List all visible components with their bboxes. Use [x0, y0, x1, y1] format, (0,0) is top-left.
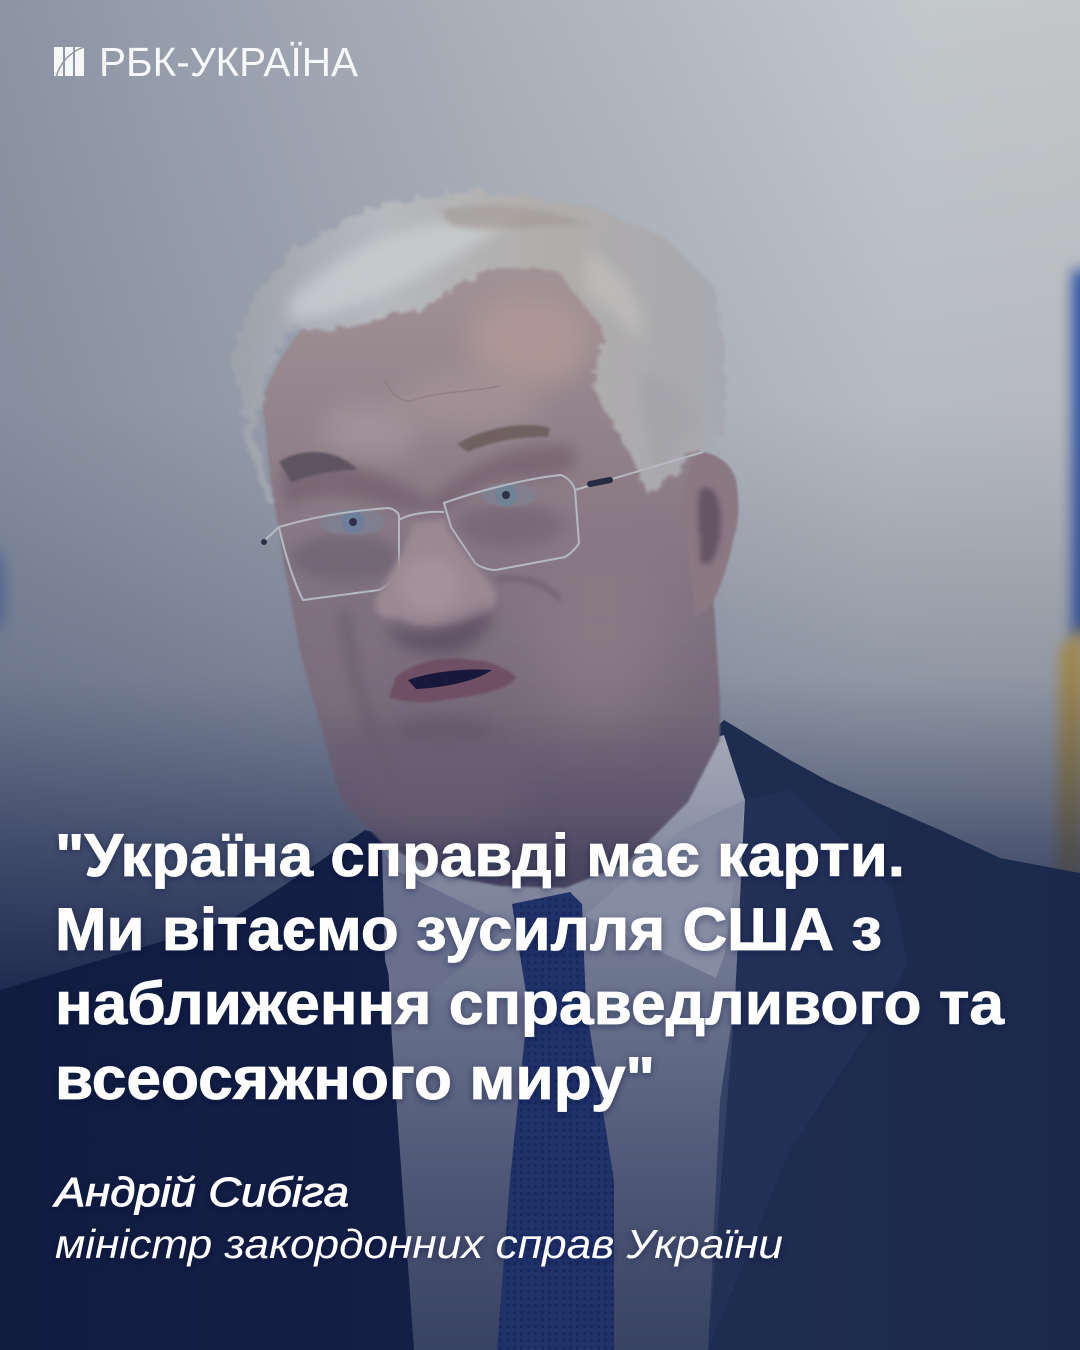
quote: наближення справедливого та: [55, 970, 1005, 1037]
speaker title: міністр закордонних справ України: [55, 1221, 783, 1267]
nasolabial fold: [496, 579, 560, 600]
forehead highlights: [320, 295, 590, 458]
attribution: [52, 1169, 783, 1267]
left collar: [382, 850, 510, 1020]
logo: [54, 39, 359, 85]
suit jacket: [0, 720, 1080, 1350]
brow shadow: [280, 445, 576, 512]
right collar: [585, 800, 745, 978]
forehead wrinkles: [385, 380, 500, 401]
ear: [682, 452, 738, 617]
speaker name: Андрій Сибіга: [52, 1169, 349, 1215]
logo wordmark: РБК-УКРАЇНА: [99, 39, 359, 85]
shirt: [382, 735, 745, 1350]
left eye: [319, 509, 385, 535]
cheek shading: [310, 540, 670, 830]
eyebrows: [279, 452, 358, 483]
glasses hinge: [590, 480, 610, 484]
quote: всеосяжного миру": [55, 1045, 655, 1112]
hair: [232, 190, 725, 503]
quote: "Україна справді має карти.: [55, 822, 905, 889]
logo mark: [54, 47, 84, 77]
mouth: [389, 658, 516, 744]
glasses: [263, 452, 703, 600]
quote: Ми вітаємо зусилля США з: [55, 896, 882, 963]
nose: [375, 520, 496, 655]
right eye: [481, 483, 537, 507]
eye sockets: [290, 534, 400, 582]
tie: [497, 892, 614, 1350]
right lapel: [708, 790, 908, 1350]
head: [262, 250, 720, 888]
quote: [55, 822, 1005, 1112]
